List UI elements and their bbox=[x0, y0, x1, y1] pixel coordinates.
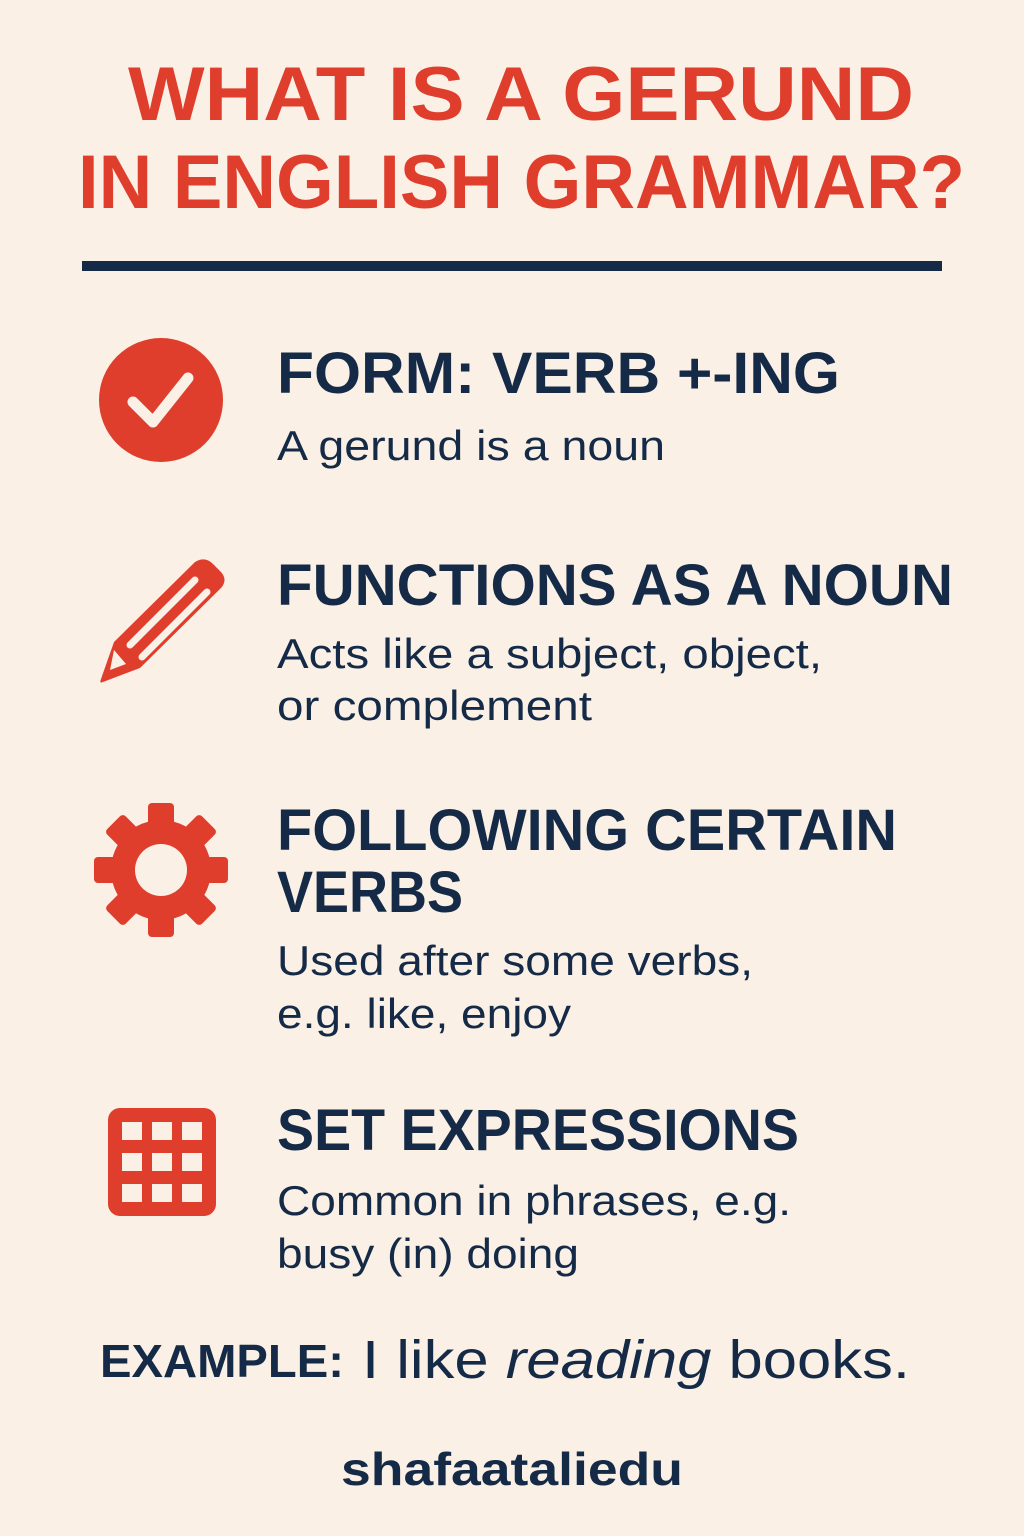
icon: pencil bbox=[100, 559, 224, 683]
icon: gear bbox=[94, 803, 228, 937]
section: set expressions bbox=[277, 1098, 799, 1277]
section: form: FORM: VERB +-ING bbox=[277, 341, 840, 406]
section: set expressions: busy (in) doing bbox=[277, 1230, 579, 1277]
example bbox=[100, 1330, 910, 1390]
section: functions: or complement bbox=[277, 682, 592, 729]
example: EXAMPLE: bbox=[100, 1335, 344, 1387]
section: functions: FUNCTIONS AS A NOUN bbox=[277, 553, 953, 618]
footer: shafaataliedu bbox=[341, 1443, 683, 1495]
section: following verbs bbox=[277, 798, 897, 1037]
section: following verbs: Used after some verbs, bbox=[277, 937, 753, 984]
section: set expressions: Common in phrases, e.g. bbox=[277, 1177, 791, 1224]
section: functions: Acts like a subject, object, bbox=[277, 630, 822, 677]
section: form bbox=[277, 341, 840, 469]
section: following verbs: e.g. like, enjoy bbox=[277, 990, 571, 1037]
section: following verbs: VERBS bbox=[277, 860, 463, 925]
title: IN ENGLISH GRAMMAR? bbox=[78, 140, 965, 225]
icon: grid bbox=[108, 1108, 216, 1216]
icon: check circle bbox=[99, 338, 223, 462]
section: following verbs: FOLLOWING CERTAIN bbox=[277, 798, 897, 863]
section: set expressions: SET EXPRESSIONS bbox=[277, 1098, 799, 1163]
title bbox=[78, 52, 965, 225]
section: functions bbox=[277, 553, 953, 729]
title: WHAT IS A GERUND bbox=[128, 52, 914, 137]
section: form: A gerund is a noun bbox=[277, 422, 665, 469]
example: I like reading books. bbox=[362, 1330, 910, 1390]
